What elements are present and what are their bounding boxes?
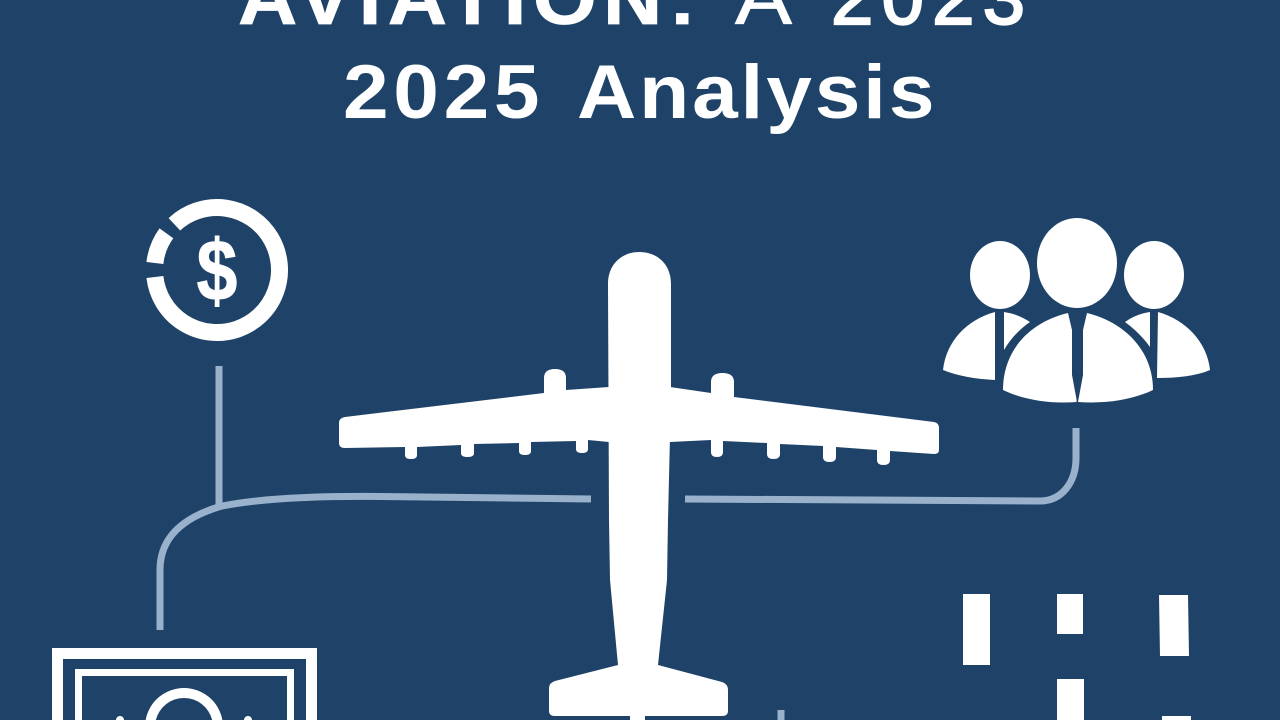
- title: Analysis: [577, 49, 934, 134]
- icon: banknote: [52, 648, 317, 720]
- icon: airplane: [339, 252, 939, 720]
- airplane wings: [339, 369, 939, 465]
- icon: group of people: [943, 218, 1210, 402]
- connector: tail stub: [778, 710, 784, 720]
- left person: [943, 241, 1030, 380]
- coin ring: [155, 208, 280, 333]
- banknote centre circle: [146, 688, 222, 720]
- centre person: [1003, 218, 1153, 402]
- icon: dollar coin: [155, 208, 280, 333]
- airplane fuselage and tail: [549, 252, 728, 720]
- banknote outer frame: [52, 648, 317, 720]
- title: 2025: [343, 49, 540, 134]
- bar blocks: [963, 594, 1191, 720]
- title: [238, 0, 1025, 134]
- connector: dollar icon to main line: [216, 366, 222, 505]
- banknote inner frame: [75, 669, 294, 720]
- connector: banknote to fuselage: [160, 496, 591, 630]
- banknote side dots: [116, 716, 252, 720]
- right person: [1124, 241, 1210, 378]
- coin ring segment: [155, 233, 166, 263]
- connector: people to fuselage: [685, 428, 1076, 501]
- dollar sign: $: [197, 222, 237, 318]
